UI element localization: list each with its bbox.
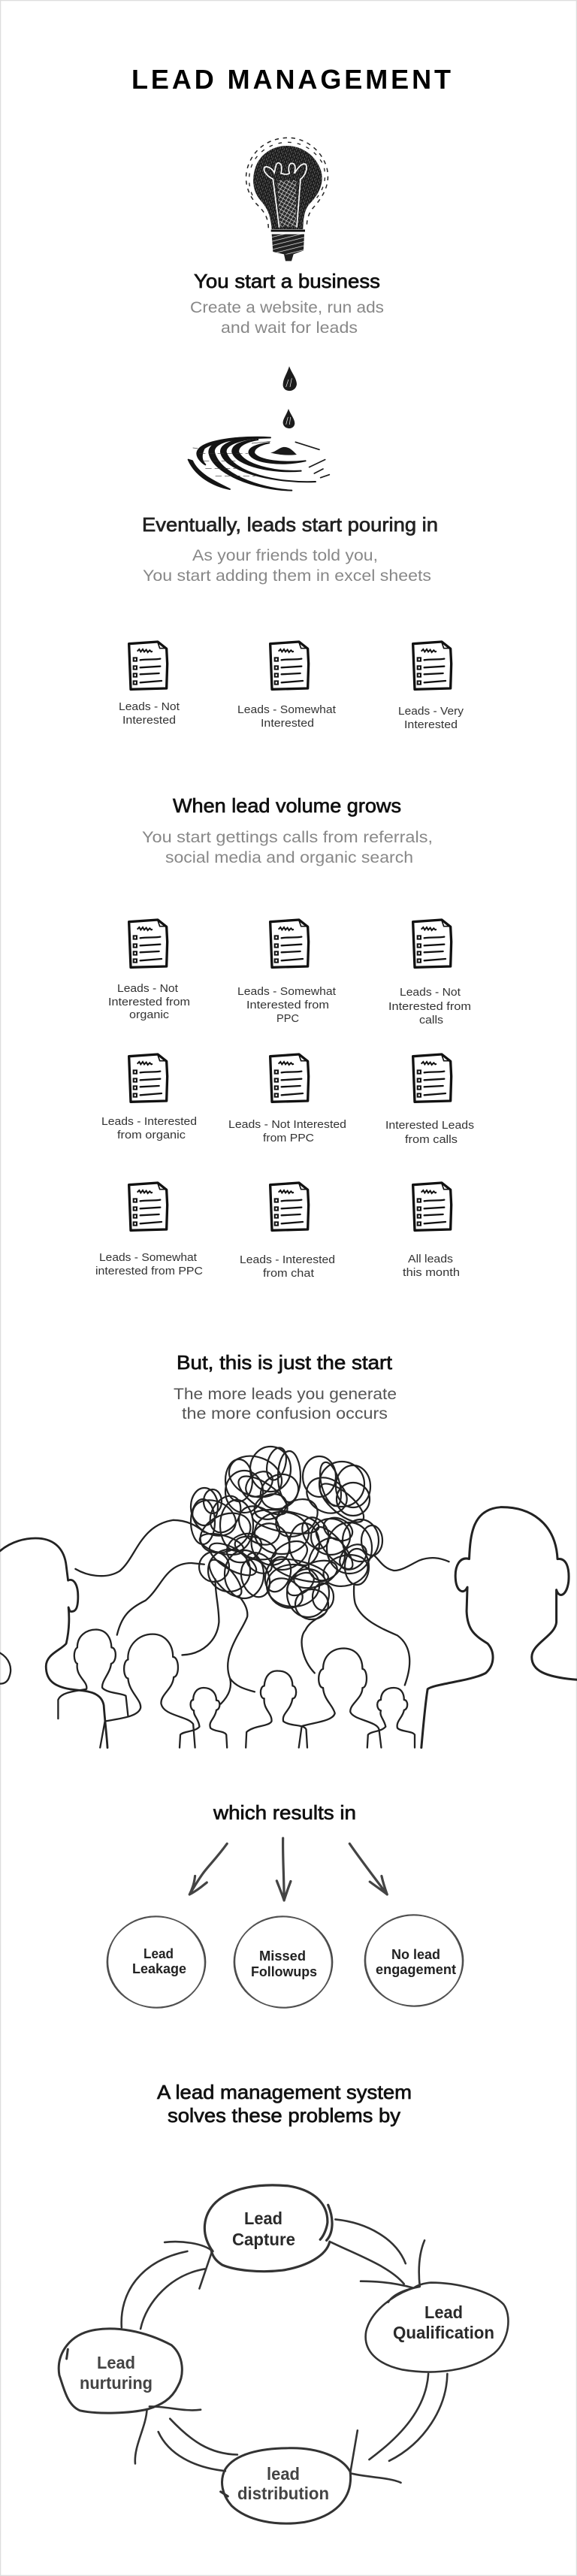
text block [190, 299, 384, 337]
label: lead distribution: lead [267, 2464, 300, 2484]
label: lead capture [232, 2209, 295, 2249]
text block: You start adding them in excel sheets [143, 567, 431, 585]
problem: missed followups: Followups [251, 1964, 317, 1979]
panel: three lead sheets [119, 642, 464, 731]
sheet: somewhat interested from PPC [95, 1183, 203, 1277]
text block: Create a website, run ads [190, 299, 384, 316]
node shapes and cycle arrows [59, 2185, 508, 2523]
sheet: not interested from organic: Leads - Not [117, 982, 179, 995]
sheet: somewhat interested [237, 642, 337, 730]
sheet: very interested [398, 642, 464, 731]
heading: solves these problems by [168, 2104, 400, 2127]
problem: no lead engagement: No lead [391, 1947, 440, 1962]
label: lead nurturing [80, 2353, 153, 2393]
arrows to the three results [189, 1838, 387, 1900]
text block: The more leads you generate [174, 1386, 397, 1403]
label: lead capture: Capture [232, 2230, 295, 2249]
node: lead qualification outline [366, 2283, 508, 2372]
heading: You start a business [194, 270, 380, 292]
problem: lead leakage [102, 1910, 210, 2014]
arrow: qualification to distribution [350, 2374, 447, 2483]
sheet: not interested from calls: Interested from [388, 1000, 471, 1013]
sheet: interested from chat: from chat [263, 1267, 315, 1280]
sheet: not interested from calls: Leads - Not [400, 986, 461, 999]
sheet: somewhat interested from PPC: interested from PPC [95, 1265, 203, 1277]
label: lead qualification: Lead [424, 2302, 463, 2322]
sheet: interested from organic: Leads - Interested [101, 1115, 197, 1128]
arrow: nurturing to capture [122, 2242, 213, 2329]
problem: no lead engagement [360, 1909, 468, 2012]
arrow: right [349, 1843, 387, 1894]
panel: nine lead sheets [95, 920, 474, 1280]
arrow: left [189, 1843, 227, 1894]
sheet: not interested from PPC: Leads - Not Interested [228, 1118, 346, 1131]
text block [174, 1386, 397, 1423]
heading: Eventually, leads start pouring in [142, 513, 438, 536]
sheet: not interested from calls [388, 920, 471, 1026]
sheet: not interested from organic: organic [129, 1008, 170, 1021]
sheet: interested from calls [385, 1054, 474, 1146]
sheet: all leads this month [403, 1183, 460, 1279]
sheet: not interested from PPC: from PPC [263, 1132, 314, 1144]
heading: A lead management system [157, 2081, 412, 2103]
sheet: somewhat interested from PPC [237, 920, 337, 1025]
sheet: somewhat interested from PPC: Interested from [246, 999, 329, 1011]
section: you start a business [190, 138, 384, 337]
sheet: not interested from organic [108, 920, 190, 1021]
label: lead qualification [393, 2302, 494, 2342]
sheet: not interested from calls: calls [419, 1014, 443, 1026]
sheet: somewhat interested from PPC: Leads - Somewhat [237, 985, 337, 998]
text block: You start gettings calls from referrals, [142, 829, 433, 846]
title: LEAD MANAGEMENT [131, 64, 451, 95]
node: lead distribution outline [221, 2448, 351, 2523]
icon: water drops and ripples [189, 366, 329, 491]
text block: the more confusion occurs [182, 1405, 388, 1423]
heading: When lead volume grows [173, 794, 401, 817]
label: lead distribution: distribution [237, 2484, 329, 2503]
people outlines and connecting strands [0, 1507, 577, 1748]
label: lead nurturing: Lead [97, 2353, 135, 2372]
node: lead nurturing outline [59, 2329, 182, 2413]
problem: missed followups: Missed [259, 1949, 306, 1964]
label: lead distribution [237, 2464, 329, 2503]
label: lead capture: Lead [244, 2209, 282, 2228]
sheet: not interested from organic: Interested from [108, 996, 190, 1008]
cycle diagram [59, 2185, 508, 2523]
text block: social media and organic search [165, 849, 413, 866]
label: lead qualification: Qualification [393, 2323, 494, 2342]
heading: But, this is just the start [177, 1351, 393, 1374]
icon: light bulb [246, 138, 328, 261]
problem: lead leakage: Lead [143, 1946, 174, 1961]
sheet: somewhat interested from PPC: Leads - Somewhat [99, 1251, 198, 1264]
sheet: interested from organic: from organic [117, 1129, 186, 1141]
sheet: somewhat interested from PPC: PPC [276, 1012, 299, 1025]
sheet: interested from chat: Leads - Interested [240, 1253, 335, 1266]
sheet: all leads this month: All leads [408, 1253, 453, 1265]
sheet: interested from calls: from calls [405, 1133, 458, 1146]
problem: lead leakage: Leakage [132, 1961, 186, 1976]
sheet: not interested: Leads - Not [119, 700, 180, 713]
sheet: interested from calls: Interested Leads [385, 1119, 474, 1132]
heading [157, 2081, 412, 2127]
panel: three problems [102, 1909, 468, 2014]
sheet: interested from chat [240, 1183, 335, 1280]
text block: and wait for leads [221, 319, 358, 337]
tangle of lines [187, 1446, 382, 1619]
heading: which results in [213, 1801, 356, 1824]
arrow: distribution to nurturing [135, 2406, 237, 2471]
illustration: crowd connected to a tangle [0, 1446, 577, 1748]
sheet: not interested: Interested [122, 714, 176, 727]
text block [142, 829, 433, 866]
node: lead capture outline [204, 2185, 332, 2272]
sheet: somewhat interested: Leads - Somewhat [237, 703, 337, 716]
sheet: very interested: Interested [404, 718, 458, 731]
label: lead nurturing: nurturing [80, 2373, 153, 2393]
sheet: not interested from PPC [228, 1054, 346, 1144]
arrow: middle [276, 1838, 291, 1900]
sheet: very interested: Leads - Very [398, 705, 464, 718]
sheet: interested from organic [101, 1054, 197, 1141]
sheet: not interested [119, 642, 180, 727]
problem: missed followups [229, 1910, 337, 2014]
arrow: capture to qualification [331, 2219, 424, 2288]
sheet: all leads this month: this month [403, 1266, 460, 1279]
section: leads start pouring in [142, 366, 438, 585]
sheet: somewhat interested: Interested [261, 717, 314, 730]
problem: no lead engagement: engagement [376, 1962, 456, 1977]
text block [143, 547, 431, 585]
text block: As your friends told you, [192, 547, 378, 564]
